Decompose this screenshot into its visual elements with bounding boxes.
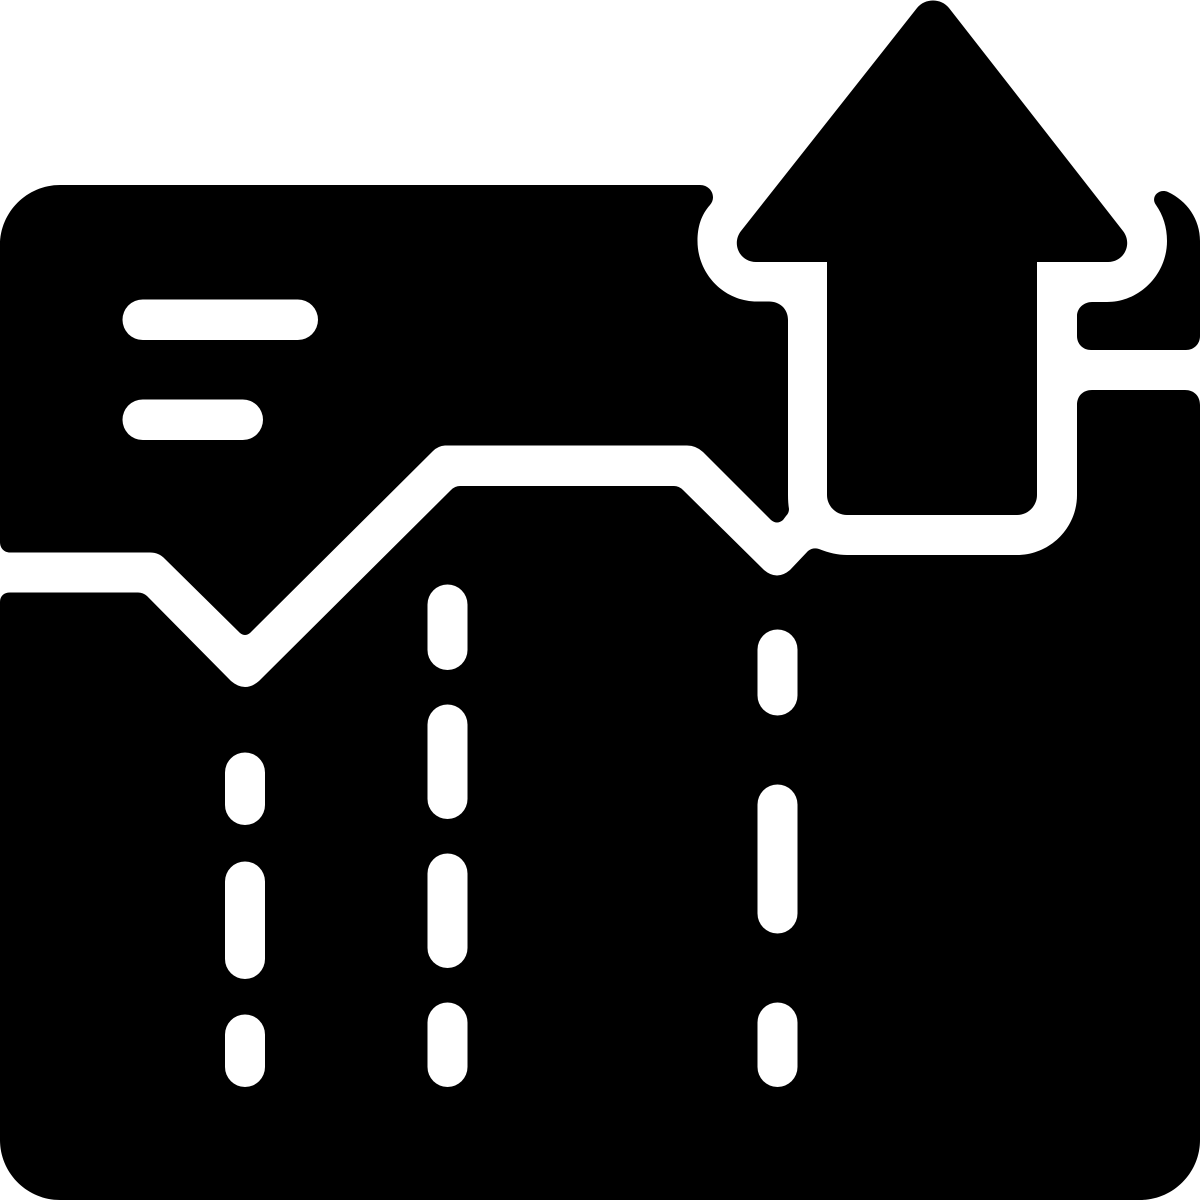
panel: lower chart area bbox=[0, 390, 1200, 1200]
dashed line: left marker bbox=[225, 752, 265, 1087]
panel: upper chart area bbox=[0, 185, 789, 635]
text lines: legend bars bbox=[122, 300, 318, 440]
dashed line: middle marker bbox=[428, 584, 468, 1087]
panel: upper right chart fragment bbox=[1077, 191, 1200, 350]
dashed line: right marker bbox=[758, 630, 798, 1087]
arrow: up arrow bbox=[737, 0, 1127, 515]
